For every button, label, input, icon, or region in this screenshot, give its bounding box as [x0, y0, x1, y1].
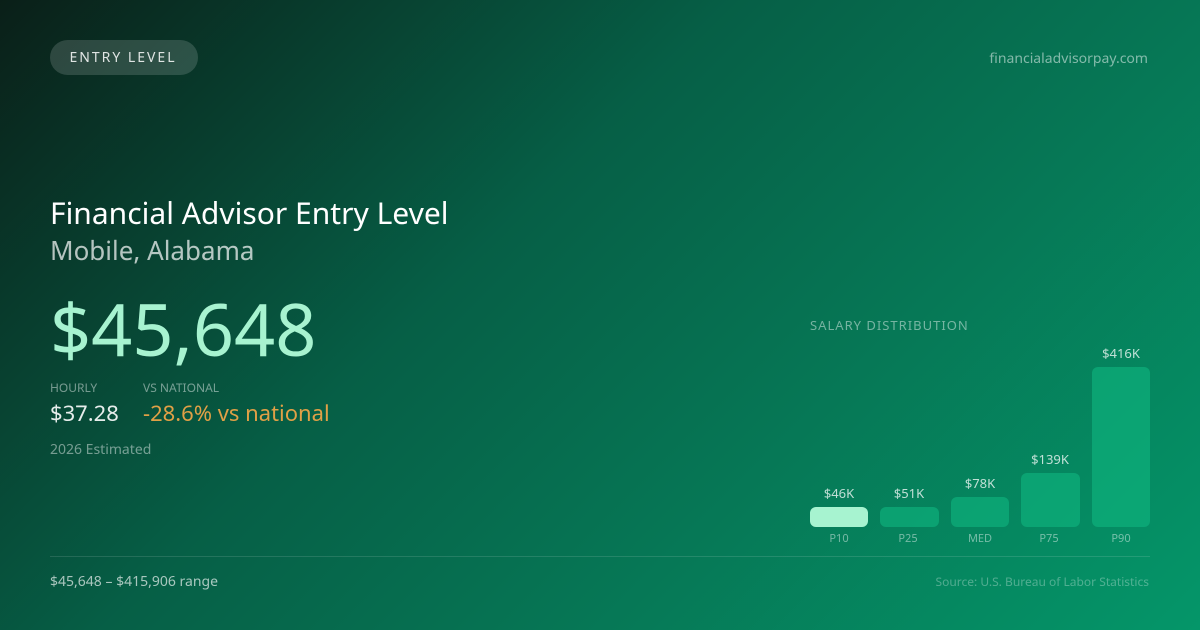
bar P25 — [880, 484, 939, 527]
footer divider — [50, 556, 1150, 557]
bar P10: $46K — [824, 484, 854, 502]
main salary: $45,648 — [50, 280, 316, 378]
hourly value: $37.28 — [50, 398, 119, 428]
chart: salary distribution — [810, 316, 1150, 546]
vs national label: VS NATIONAL — [143, 379, 219, 396]
vs national value: -28.6% vs national — [143, 398, 330, 428]
label median: MED — [968, 531, 992, 546]
bar P90 — [1092, 344, 1150, 527]
badge: entry level — [50, 40, 198, 75]
location subtitle: Mobile, Alabama — [50, 232, 254, 268]
salary range: $45,648 – $415,906 range — [50, 572, 218, 591]
bar P25: $51K — [894, 484, 924, 502]
label P90: P90 — [1111, 531, 1131, 546]
badge: entry level: ENTRY LEVEL — [69, 48, 177, 67]
estimate note: 2026 Estimated — [50, 440, 151, 459]
hourly label: HOURLY — [50, 379, 97, 396]
label P10: P10 — [829, 531, 849, 546]
bar P10 — [810, 484, 868, 527]
bar P75: $139K — [1031, 450, 1069, 468]
label P25: P25 — [898, 531, 918, 546]
bar P75 — [1021, 450, 1080, 527]
label P75: P75 — [1039, 531, 1059, 546]
chart heading: SALARY DISTRIBUTION — [810, 316, 969, 334]
bar median — [951, 474, 1009, 527]
bar median: $78K — [965, 474, 995, 492]
bar P90: $416K — [1102, 344, 1140, 362]
site domain: financialadvisorpay.com — [989, 49, 1148, 68]
source: Source: U.S. Bureau of Labor Statistics — [936, 573, 1149, 590]
title: Financial Advisor Entry Level — [50, 192, 449, 233]
